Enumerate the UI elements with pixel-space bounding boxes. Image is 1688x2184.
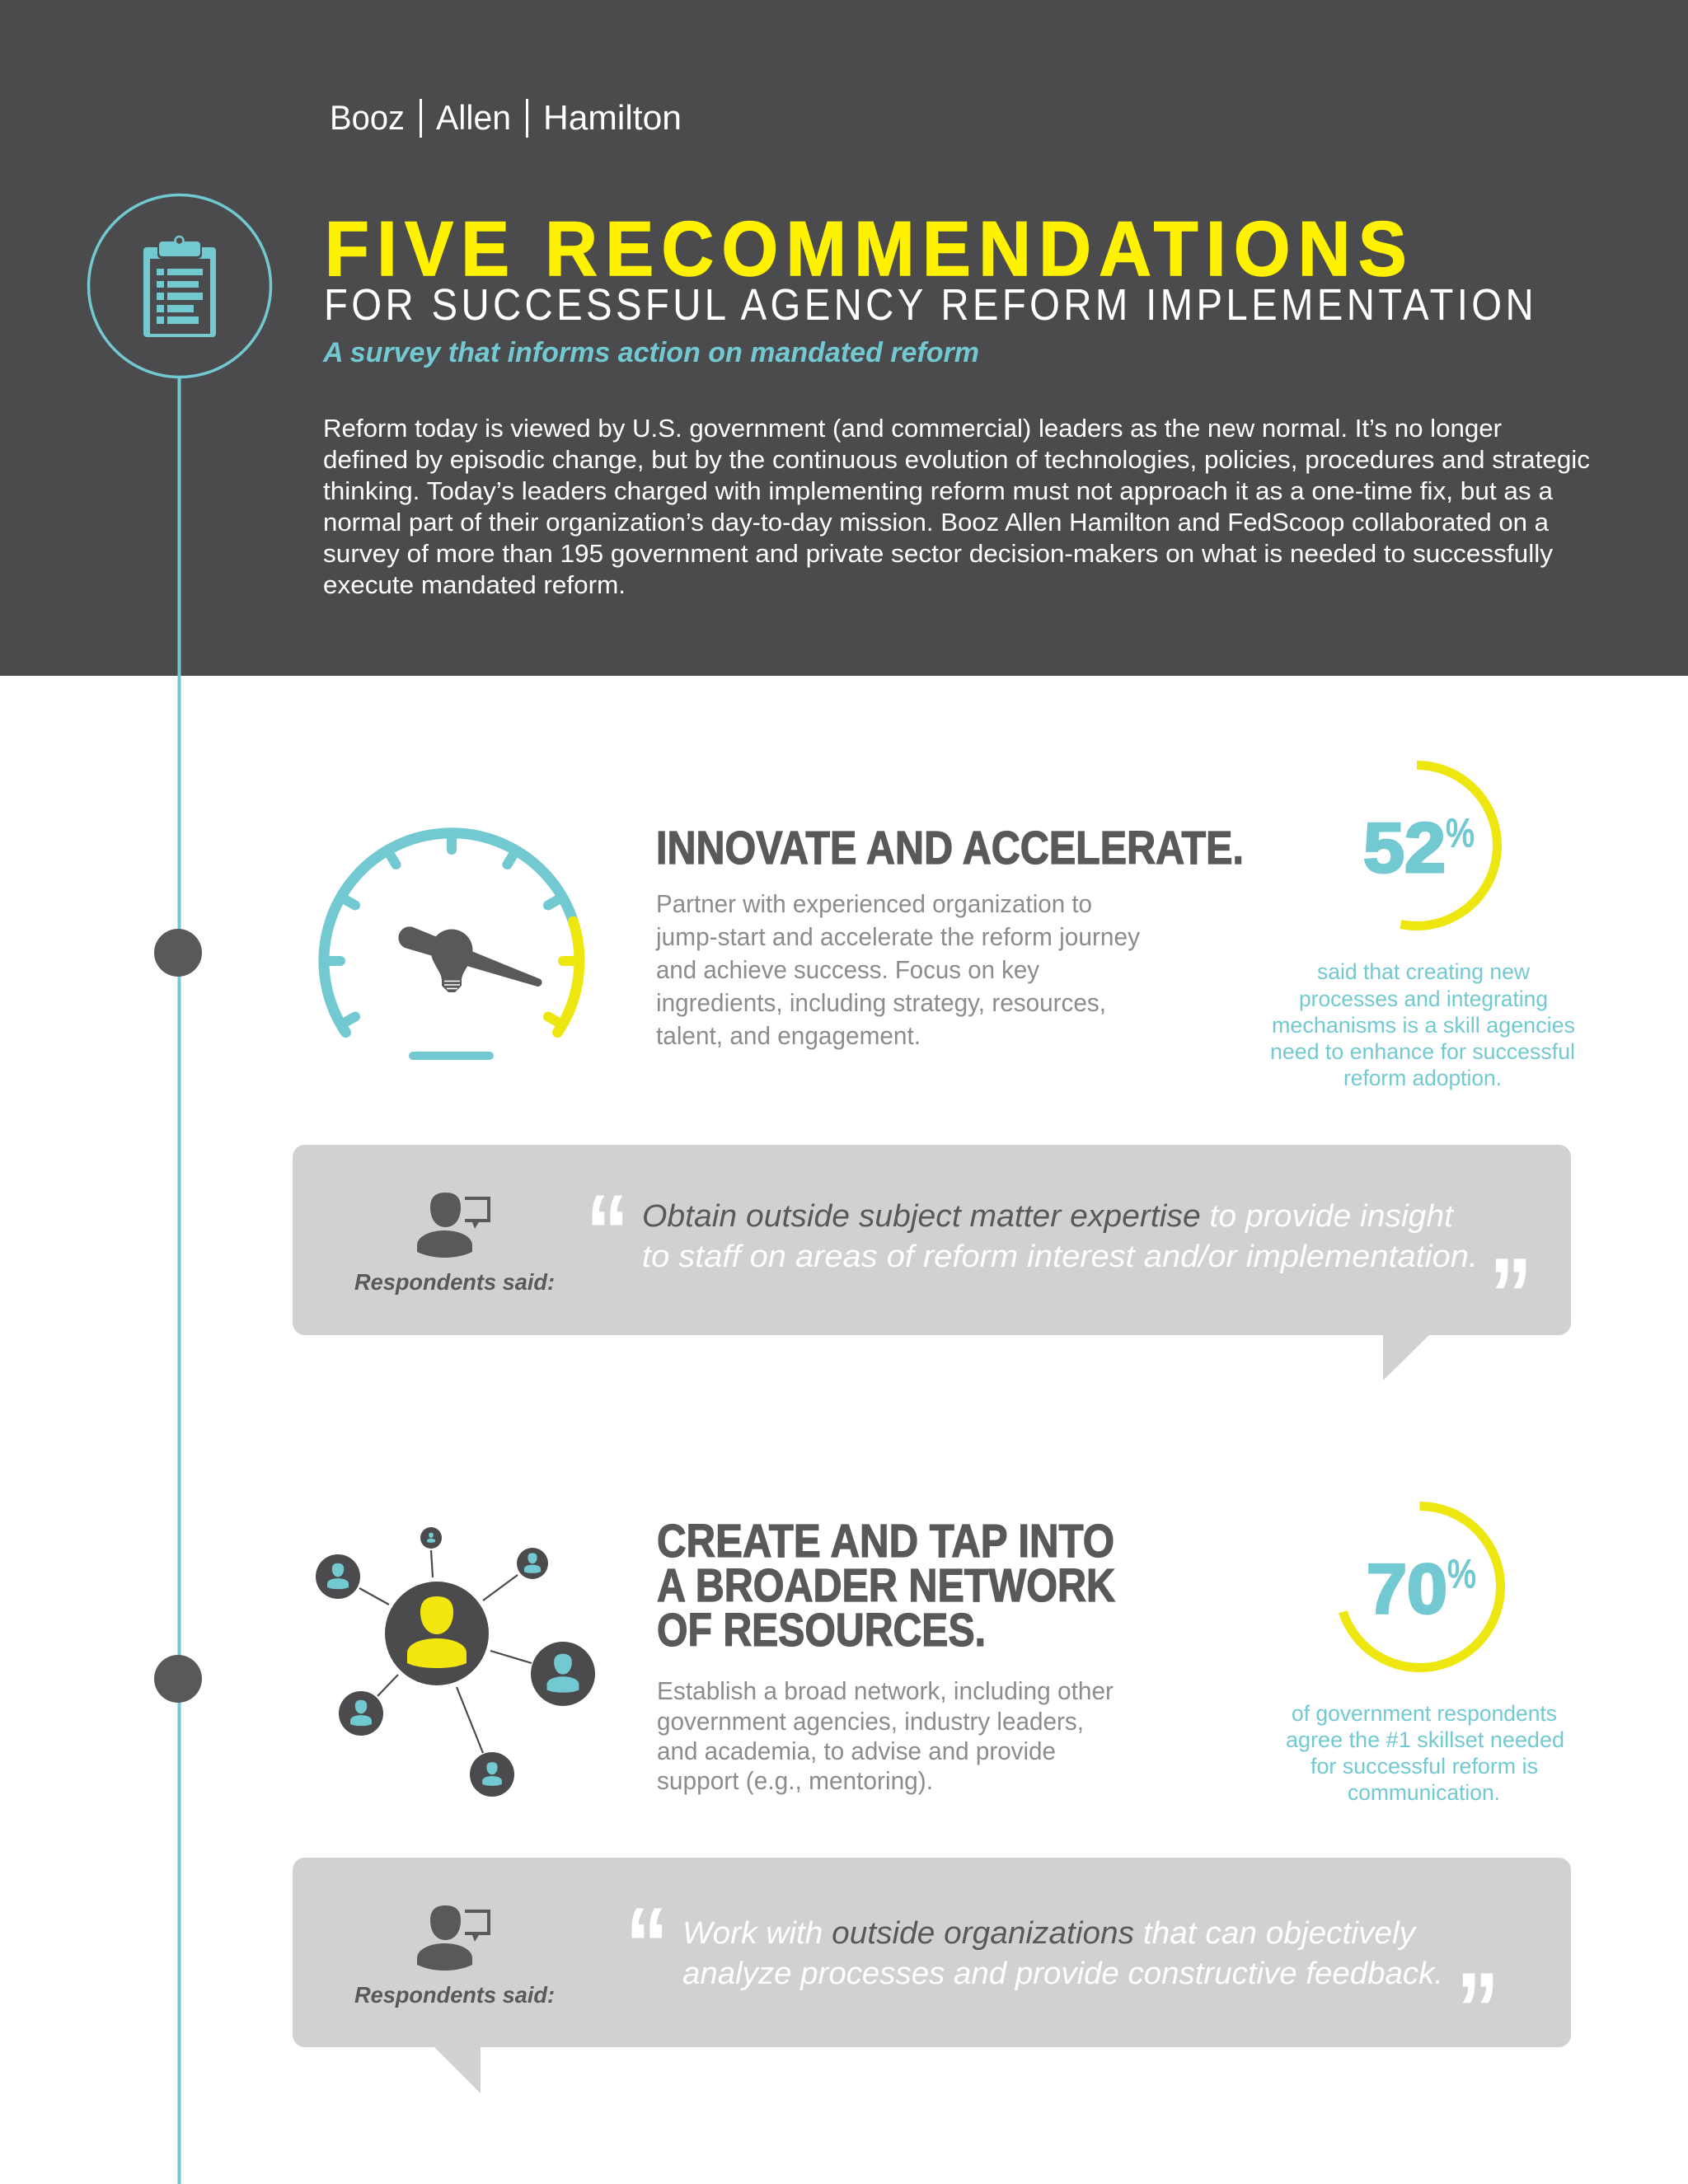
speech bubble background	[293, 1858, 1571, 2093]
body text: innovate: talent, and engagement.	[656, 1021, 921, 1050]
timeline dot 2	[154, 1655, 202, 1703]
open quote mark: “	[626, 1886, 668, 2003]
intro paragraph: normal part of their organization’s day-to-day mission. Booz Allen Hamilton and FedScoop collaborated on a	[323, 508, 1550, 537]
label: respondents said: Respondents said:	[354, 1982, 555, 2008]
icon: people network	[316, 1527, 595, 1797]
callout: respondents quote 1	[293, 1145, 1571, 1380]
body text: innovate: and achieve success. Focus on key	[656, 955, 1039, 984]
intro paragraph: execute mandated reform.	[323, 570, 626, 599]
intro paragraph	[323, 414, 1590, 599]
logo: Booz Allen Hamilton: Booz	[330, 98, 405, 137]
stat caption: 70 percent: of government respondents	[1292, 1701, 1557, 1726]
body text: network: and academia, to advise and provide	[657, 1736, 1056, 1765]
stat caption: 52 percent: need to enhance for successful	[1270, 1039, 1575, 1064]
heading: create and tap	[657, 1515, 1115, 1657]
body text: innovate: Partner with experienced organization to	[656, 889, 1092, 918]
stat ring: 70 percent: 70	[1367, 1550, 1447, 1629]
intro paragraph: defined by episodic change, but by the continuous evolution of technologies, policies, procedures and strategic	[323, 445, 1590, 474]
tagline: A survey that informs action on mandated reform	[322, 337, 979, 368]
heading: create and tap: CREATE AND TAP INTO	[657, 1515, 1114, 1568]
body text: network	[657, 1676, 1114, 1795]
label: respondents said: Respondents said:	[354, 1269, 555, 1295]
heading: innovate and accelerate: INNOVATE AND ACCELERATE.	[656, 822, 1244, 874]
stat ring: 52 percent	[1363, 765, 1497, 926]
callout: respondents quote 2	[293, 1858, 1571, 2093]
body text: innovate: ingredients, including strategy, resources,	[656, 988, 1106, 1017]
body text: network: Establish a broad network, including other	[657, 1676, 1114, 1705]
stat caption: 70 percent: agree the #1 skillset needed	[1286, 1727, 1564, 1752]
heading: create and tap: A BROADER NETWORK	[657, 1559, 1115, 1612]
body text: network: support (e.g., mentoring).	[657, 1766, 933, 1795]
icon: speedometer gauge with lightbulb needle	[324, 833, 579, 1056]
stat ring: 70 percent: %	[1447, 1553, 1476, 1596]
quote text: Work with outside organizations that can objectively	[682, 1916, 1417, 1951]
body text: innovate: jump-start and accelerate the reform journey	[655, 922, 1140, 951]
stat caption: 70 percent	[1286, 1701, 1564, 1805]
quote text: to staff on areas of reform interest and/or implementation.	[642, 1240, 1478, 1274]
quote text	[642, 1199, 1478, 1274]
quote text: analyze processes and provide constructive feedback.	[682, 1957, 1443, 1991]
body text: innovate	[655, 889, 1140, 1050]
logo: Booz Allen Hamilton: Hamilton	[543, 98, 682, 137]
stat ring: 70 percent	[1343, 1507, 1500, 1667]
logo: Booz Allen Hamilton: Allen	[436, 98, 511, 137]
stat caption: 52 percent: said that creating new	[1317, 959, 1531, 984]
speech bubble background	[293, 1145, 1571, 1380]
body text: network: government agencies, industry leaders,	[657, 1707, 1084, 1736]
stat caption: 70 percent: communication.	[1348, 1780, 1500, 1805]
intro paragraph: Reform today is viewed by U.S. government (and commercial) leaders as the new normal. It’s no longer	[323, 414, 1502, 443]
panel: header background	[0, 0, 1688, 676]
icon: clipboard in circle	[89, 194, 270, 377]
open quote mark: “	[586, 1173, 629, 1290]
stat caption: 52 percent: processes and integrating	[1299, 987, 1548, 1011]
intro paragraph: thinking. Today’s leaders charged with implementing reform must not approach it as a one-time fix, but as a	[323, 476, 1554, 505]
title: FIVE RECOMMENDATIONS	[325, 205, 1414, 292]
stat caption: 52 percent: reform adoption.	[1343, 1066, 1502, 1090]
subtitle: FOR SUCCESSFUL AGENCY REFORM IMPLEMENTATION	[324, 280, 1537, 330]
quote text	[682, 1916, 1443, 1991]
quote text: Obtain outside subject matter expertise to provide insight	[642, 1199, 1454, 1234]
stat caption: 70 percent: for successful reform is	[1311, 1754, 1538, 1779]
timeline dot 1	[154, 929, 202, 977]
close quote mark: ”	[1489, 1236, 1532, 1353]
stat ring: 52 percent: %	[1446, 812, 1475, 855]
stat caption: 52 percent	[1270, 959, 1575, 1090]
stat caption: 52 percent: mechanisms is a skill agencies	[1272, 1013, 1575, 1038]
logo: Booz Allen Hamilton	[330, 98, 682, 138]
stat ring: 52 percent: 52	[1363, 809, 1446, 888]
intro paragraph: survey of more than 195 government and private sector decision-makers on what is needed to successfully	[323, 539, 1554, 568]
icon: person speaking	[417, 1905, 490, 1971]
close quote mark: ”	[1456, 1951, 1499, 2068]
timeline line	[178, 378, 181, 2184]
heading: create and tap: OF RESOURCES.	[657, 1604, 986, 1657]
icon: person speaking	[417, 1193, 490, 1258]
